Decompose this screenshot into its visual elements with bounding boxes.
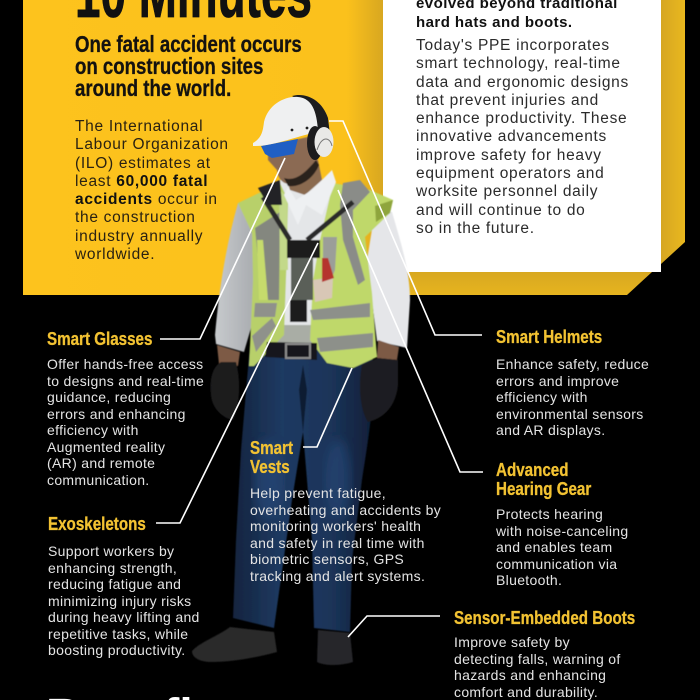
callout: Exoskeletons: repetitive tasks, while	[48, 626, 188, 642]
callout: Smart Helmets: Smart Helmets	[496, 326, 602, 347]
text block: PPE description: improve safety for heavy	[416, 147, 602, 164]
callout: Smart Vests: tracking and alert systems.	[250, 568, 425, 584]
callout: Smart Glasses: guidance, reducing	[47, 389, 171, 405]
text block: ILO estimate	[75, 118, 229, 263]
boots	[192, 627, 277, 662]
text block: ILO estimate: (ILO) estimates at	[75, 155, 211, 172]
text block: PPE description: enhance productivity. These	[416, 110, 627, 127]
text block: PPE description: smart technology, real-time	[416, 55, 621, 72]
text block: PPE lead statement	[416, 0, 618, 31]
text block: PPE description: worksite personnel daily	[416, 183, 598, 200]
callout: Exoskeletons	[48, 513, 200, 658]
callout: Exoskeletons: Support workers by	[48, 543, 174, 559]
text block: ILO estimate: Labour Organization	[75, 136, 229, 153]
sleeves	[215, 203, 262, 352]
text block: PPE description	[416, 37, 629, 237]
callout: Advanced Hearing Gear: with noise-canceling	[496, 522, 628, 538]
callout: Exoskeletons: minimizing injury risks	[48, 592, 192, 608]
text block: PPE description: data and ergonomic designs	[416, 74, 629, 91]
callout: Advanced Hearing Gear: and enables team	[496, 539, 612, 555]
subheading: fatal accident statement: around the world.	[75, 75, 231, 101]
callout: Smart Vests: overheating and accidents by	[250, 502, 441, 518]
subheading: fatal accident statement: on construction sites	[75, 53, 263, 79]
hands and gloves	[217, 345, 240, 366]
vest right panel	[310, 183, 393, 368]
text block: ILO estimate: worldwide.	[75, 246, 155, 263]
neck and collar	[284, 160, 322, 195]
callout: Smart Glasses: to designs and real-time	[47, 372, 204, 388]
text block: PPE lead statement: hard hats and boots.	[416, 14, 573, 31]
callout: Advanced Hearing Gear: Advanced	[496, 459, 569, 480]
belt	[265, 342, 317, 360]
callout: Smart Glasses: Augmented reality	[47, 438, 165, 454]
callout: Smart Glasses: efficiency with	[47, 422, 139, 438]
callout: Smart Vests: Vests	[250, 456, 290, 477]
callout: Smart Vests: Smart	[250, 437, 293, 458]
callout: Smart Helmets: errors and improve	[496, 372, 619, 388]
callout: Exoskeletons: enhancing strength,	[48, 560, 177, 576]
callout: Smart Helmets: efficiency with	[496, 389, 588, 405]
arrow: smart glasses leader	[160, 158, 285, 339]
callout: Smart Vests: Help prevent fatigue,	[250, 485, 386, 501]
text block: PPE description: and will continue to do	[416, 202, 585, 219]
jeans	[233, 345, 373, 632]
callout: Smart Glasses: (AR) and remote	[47, 455, 155, 471]
text block: ILO estimate: accidents occur in	[75, 191, 218, 208]
callout: Sensor-Embedded Boots: comfort and durability.	[454, 684, 598, 700]
callout: Advanced Hearing Gear: Protects hearing	[496, 506, 603, 522]
callout: Smart Helmets: environmental sensors	[496, 406, 644, 422]
callout: Smart Glasses: errors and enhancing	[47, 406, 186, 422]
face	[268, 136, 318, 184]
badge	[313, 277, 333, 302]
callout: Smart Vests	[250, 437, 441, 584]
text block: ILO estimate: least 60,000 fatal	[75, 173, 208, 190]
text block: ILO estimate: the construction	[75, 209, 196, 226]
harness straps	[263, 197, 353, 240]
arrow: exoskeleton leader	[156, 243, 318, 523]
callout: Smart Glasses	[47, 328, 204, 488]
callout: Advanced Hearing Gear: Hearing Gear	[496, 478, 591, 499]
callout: Smart Glasses: Smart Glasses	[47, 328, 152, 349]
callout: Smart Vests: and safety in real time with	[250, 534, 425, 550]
text block: ILO estimate: industry annually	[75, 228, 203, 245]
callout: Exoskeletons: Exoskeletons	[48, 513, 146, 534]
callout: Exoskeletons: boosting productivity.	[48, 642, 186, 658]
arrow: smart vest leader	[303, 368, 352, 447]
icon: hearing gear	[307, 126, 334, 160]
callout: Smart Vests: biometric sensors, GPS	[250, 551, 404, 567]
text block: PPE description: that prevent injuries and	[416, 92, 599, 109]
callout: Smart Glasses: communication.	[47, 472, 150, 488]
callout: Advanced Hearing Gear: Bluetooth.	[496, 572, 562, 588]
text block: PPE description: equipment operators and	[416, 165, 604, 182]
subheading: fatal accident statement	[75, 31, 302, 101]
arrow: boots leader	[348, 616, 440, 637]
text block: ILO estimate: The International	[75, 118, 203, 135]
arrow: smart helmet leader	[329, 121, 482, 335]
text block: PPE description: innovative advancements	[416, 128, 607, 145]
callout: Sensor-Embedded Boots	[454, 607, 635, 700]
callout: Smart Helmets: and AR displays.	[496, 422, 605, 438]
callout: Exoskeletons: reducing fatigue and	[48, 576, 181, 592]
shirt	[268, 180, 335, 345]
arrow: hearing gear leader	[338, 190, 483, 472]
callout: Advanced Hearing Gear: communication via	[496, 556, 617, 572]
callout: Sensor-Embedded Boots: Improve safety by	[454, 634, 570, 650]
text block: PPE description: Today's PPE incorporates	[416, 37, 610, 54]
vest left panel	[238, 183, 288, 366]
callout: Exoskeletons: during heavy lifting and	[48, 609, 200, 625]
icon: smart helmet	[253, 95, 330, 146]
icon: smart glasses	[261, 139, 298, 158]
callout: Smart Helmets	[496, 326, 649, 438]
callout: Sensor-Embedded Boots: detecting falls, warning of	[454, 650, 621, 666]
callout: Smart Helmets: Enhance safety, reduce	[496, 356, 649, 372]
text block: PPE description: so in the future.	[416, 220, 535, 237]
callout: Sensor-Embedded Boots: Sensor-Embedded Boots	[454, 607, 635, 628]
callout: Sensor-Embedded Boots: hazards and enhancing	[454, 667, 606, 683]
callout: Advanced Hearing Gear	[496, 459, 628, 588]
subheading: fatal accident statement: One fatal accident occurs	[75, 31, 302, 57]
callout: Smart Vests: monitoring workers' health	[250, 518, 421, 534]
callout: Smart Glasses: Offer hands-free access	[47, 356, 204, 372]
